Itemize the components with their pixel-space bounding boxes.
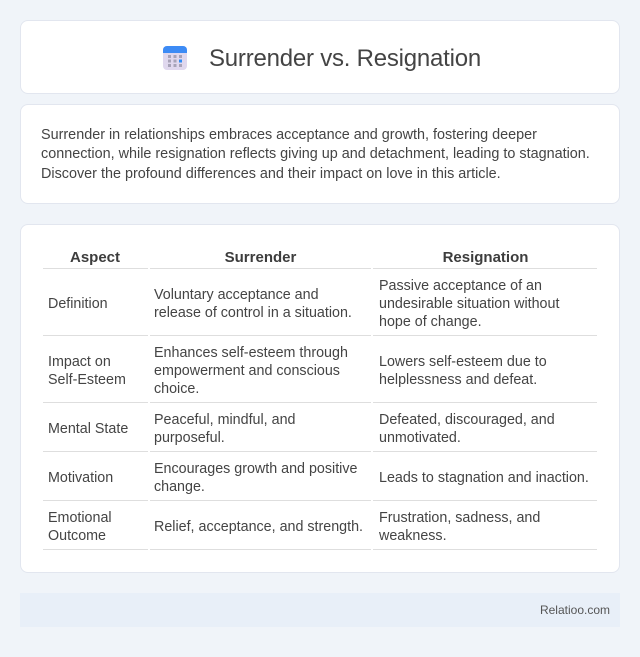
icon: calendar <box>163 46 187 70</box>
intro text: Discover the profound differences and their impact on love in this article. <box>41 166 501 182</box>
intro text: connection, while resignation reflects giving up and detachment, leading to stagnation. <box>41 146 590 162</box>
column headings: Resignation <box>443 249 528 266</box>
row: impact on self-esteem: Lowers self-esteem due to <box>379 354 547 370</box>
row: motivation: Leads to stagnation and inaction. <box>379 470 589 486</box>
intro panel <box>20 104 620 204</box>
table panel <box>20 224 620 573</box>
row: mental state: unmotivated. <box>379 430 461 446</box>
row: definition: release of control in a situation. <box>154 305 352 321</box>
intro text <box>41 126 590 182</box>
row: impact on self-esteem: empowerment and conscious <box>154 363 340 379</box>
row: definition: undesirable situation without <box>379 296 559 312</box>
row: definition <box>48 278 560 330</box>
footer bar <box>20 593 620 627</box>
row: motivation <box>48 461 589 495</box>
row: definition: Passive acceptance of an <box>379 278 542 294</box>
row: impact on self-esteem: choice. <box>154 381 199 397</box>
row: mental state: Mental State <box>48 421 128 437</box>
row: emotional outcome: Frustration, sadness, and <box>379 510 540 526</box>
row: emotional outcome <box>48 510 540 544</box>
header panel <box>20 20 620 94</box>
row: emotional outcome: weakness. <box>379 528 447 544</box>
row: emotional outcome: Relief, acceptance, and strength. <box>154 519 363 535</box>
row: impact on self-esteem <box>48 345 547 397</box>
row: impact on self-esteem: Enhances self-esteem through <box>154 345 348 361</box>
row: mental state: Peaceful, mindful, and <box>154 412 295 428</box>
column headings <box>70 249 528 266</box>
row: motivation: Motivation <box>48 470 113 486</box>
column headings: Surrender <box>225 249 296 266</box>
row: definition: Voluntary acceptance and <box>154 287 319 303</box>
row: impact on self-esteem: helplessness and defeat. <box>379 372 537 388</box>
row: impact on self-esteem: Self-Esteem <box>48 372 126 388</box>
title: Surrender vs. Resignation <box>209 45 481 72</box>
footer text: Relatioo.com <box>540 603 610 617</box>
row: emotional outcome: Emotional <box>48 510 112 526</box>
row: definition: Definition <box>48 296 108 312</box>
row: mental state: Defeated, discouraged, and <box>379 412 555 428</box>
row: definition: hope of change. <box>379 314 482 330</box>
row: motivation: change. <box>154 479 205 495</box>
column headings: Aspect <box>70 249 120 266</box>
row: emotional outcome: Outcome <box>48 528 106 544</box>
row: motivation: Encourages growth and positive <box>154 461 357 477</box>
row: mental state <box>48 412 555 446</box>
row: impact on self-esteem: Impact on <box>48 354 111 370</box>
row: mental state: purposeful. <box>154 430 225 446</box>
intro text: Surrender in relationships embraces acceptance and growth, fostering deeper <box>41 126 537 142</box>
